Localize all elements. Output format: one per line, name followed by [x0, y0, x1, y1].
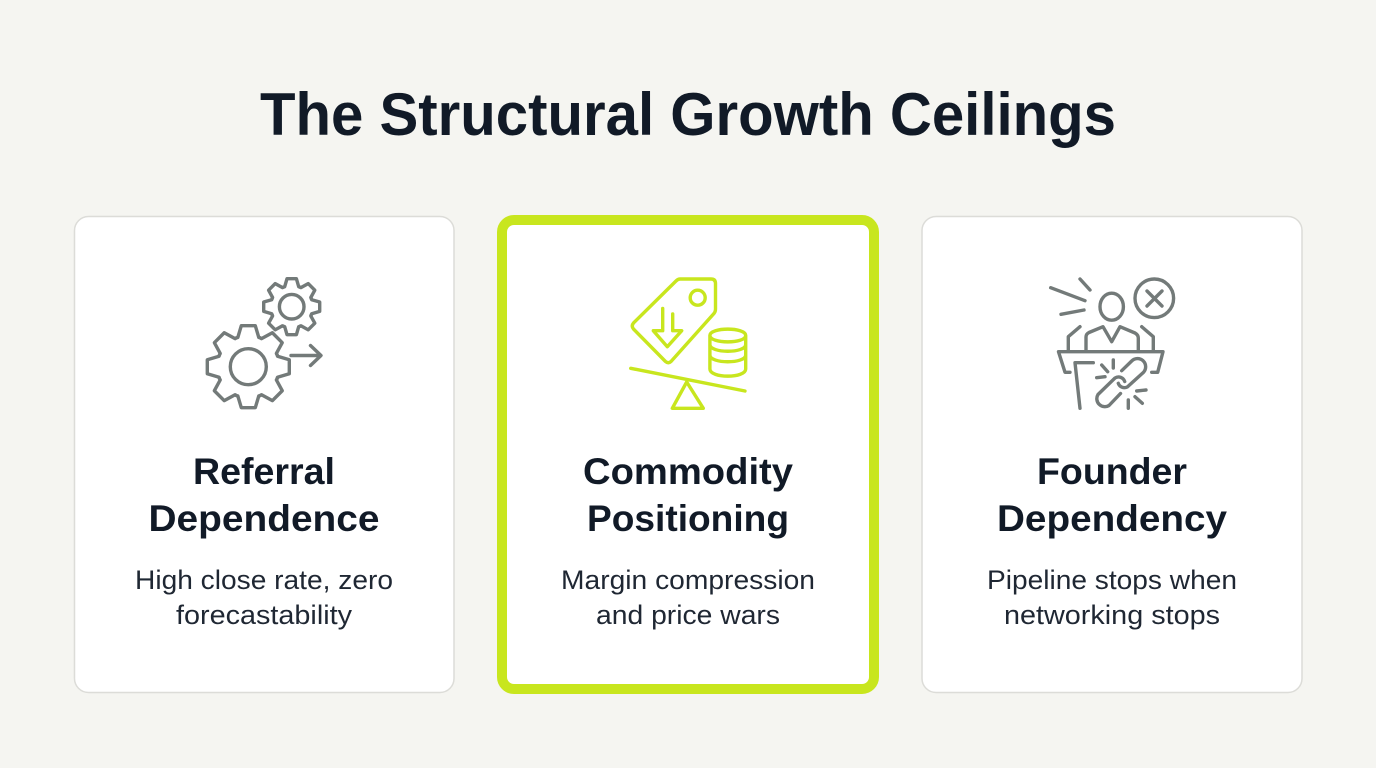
- balance beam: [631, 368, 745, 391]
- broken chain: upper link: [1118, 359, 1146, 388]
- large gear: [207, 326, 289, 408]
- panel: commodity positioning (highlighted): [502, 220, 874, 689]
- card heading: Founder: [1037, 451, 1187, 492]
- down arrow: [653, 308, 682, 347]
- card description: Pipeline stops when: [987, 565, 1237, 595]
- card heading: Referral: [193, 451, 335, 492]
- head: [1100, 293, 1123, 320]
- arrow: [291, 346, 321, 366]
- card description: forecastability: [176, 600, 353, 630]
- title: The Structural Growth Ceilings: [260, 81, 1116, 148]
- card heading: Dependence: [148, 498, 380, 539]
- card description: High close rate, zero: [135, 565, 393, 595]
- chain sparks: [1097, 360, 1146, 408]
- icon: gears with arrow: [207, 279, 321, 408]
- card background: [74, 216, 454, 692]
- card heading: [997, 451, 1227, 539]
- arms: [1068, 327, 1153, 350]
- card background: [502, 220, 874, 689]
- card description: [135, 565, 393, 630]
- small gear: [264, 279, 320, 335]
- broken chain: lower link: [1097, 377, 1125, 407]
- crossed circle: [1135, 279, 1174, 318]
- card background: [922, 216, 1302, 692]
- coin stack: [710, 329, 746, 376]
- card description: [987, 565, 1237, 630]
- card heading: Commodity: [583, 451, 793, 492]
- card heading: [583, 451, 793, 539]
- card description: networking stops: [1004, 600, 1220, 630]
- podium: [1058, 352, 1163, 408]
- panel: referral dependence: [74, 216, 454, 692]
- card heading: [148, 451, 380, 539]
- price tag: [632, 279, 716, 363]
- icon: price tag, coins and balance: [631, 279, 746, 408]
- speech lines: [1051, 279, 1090, 314]
- icon: speaker at podium with broken chain: [1051, 279, 1174, 408]
- fulcrum: [672, 382, 703, 408]
- card heading: Positioning: [587, 498, 789, 539]
- card description: and price wars: [596, 600, 780, 630]
- card description: Margin compression: [561, 565, 815, 595]
- body: [1086, 327, 1138, 350]
- panel: founder dependency: [922, 216, 1302, 692]
- card heading: Dependency: [997, 498, 1227, 539]
- card description: [561, 565, 815, 630]
